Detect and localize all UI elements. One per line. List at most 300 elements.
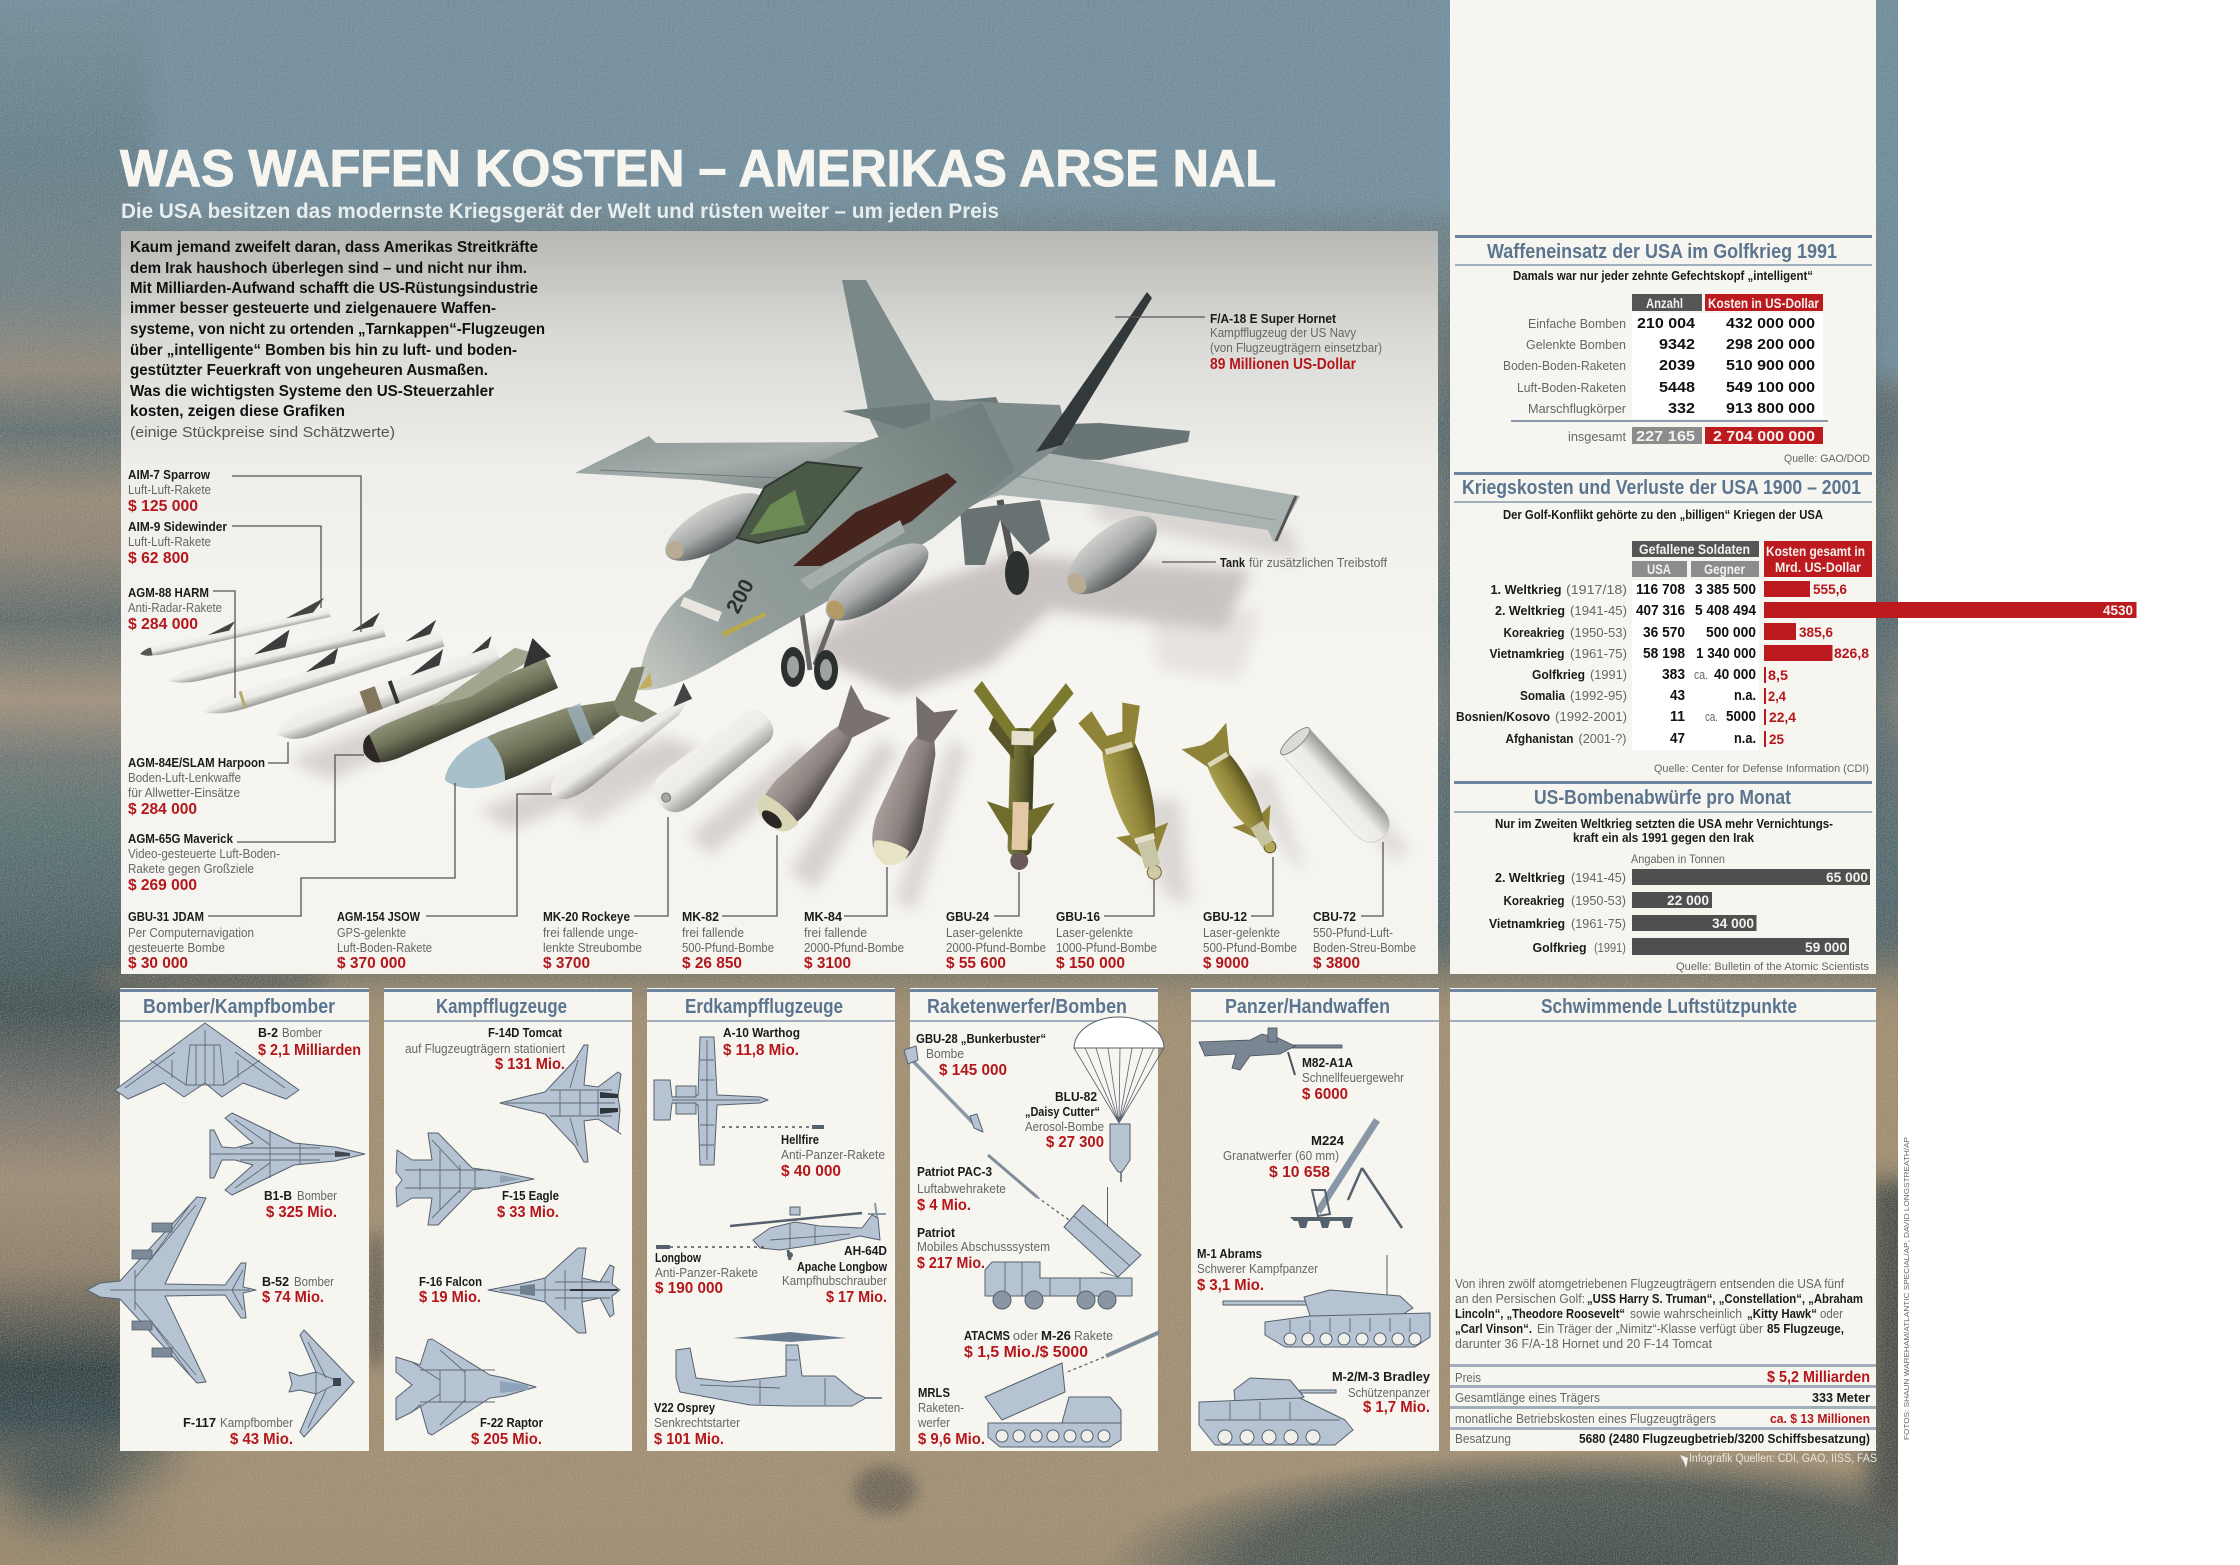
label: M224 xyxy=(1223,1134,1344,1181)
icon: ATACMS missile and MRLS launcher xyxy=(985,1332,1160,1447)
icon: B1-B xyxy=(210,1113,365,1195)
row: 1. Weltkrieg xyxy=(1490,581,1847,598)
label: F-22: $ 205 Mio. xyxy=(471,1431,542,1448)
label: F-15 xyxy=(497,1189,559,1221)
label: M-2/M-3 Bradley: $ 1,7 Mio. xyxy=(1363,1399,1430,1416)
label: A-10: A-10 Warthog xyxy=(723,1026,800,1040)
icon: Longbow missile path xyxy=(656,1245,765,1249)
row: Somalia: (1992-95) xyxy=(1570,689,1627,703)
row: Somalia: Somalia xyxy=(1520,689,1566,703)
icon: AGM-88 HARM missile xyxy=(197,618,445,721)
heading: US-Bombenabwürfe pro Monat xyxy=(1534,787,1791,809)
row: Golfkrieg: 383 xyxy=(1662,666,1685,683)
row: Vietnamkrieg: (1961-75) xyxy=(1570,647,1627,661)
icon: GBU-24 bomb xyxy=(969,681,1074,871)
row: Bosnien/Kosovo xyxy=(1456,708,1796,725)
callout: GBU-12: Laser-gelenkte xyxy=(1203,926,1280,940)
row: Vietnamkrieg xyxy=(1490,645,1869,662)
label: Longbow xyxy=(655,1251,758,1297)
unit note: Angaben in Tonnen xyxy=(1631,852,1725,866)
icon: right stabilizer xyxy=(1030,423,1190,460)
label: M82-A1A: $ 6000 xyxy=(1302,1086,1348,1103)
text block: carriers: „Carl Vinson“. xyxy=(1455,1322,1532,1336)
label: B1-B: B1-B xyxy=(264,1189,292,1203)
icon: GBU-28 bomb xyxy=(904,1046,983,1132)
label: BLU-82: $ 27 300 xyxy=(1046,1134,1104,1151)
label: Apache: $ 17 Mio. xyxy=(826,1289,887,1306)
text block: carriers: oder xyxy=(1820,1307,1843,1321)
callout: AIM-7 Sparrow xyxy=(128,468,361,632)
bar: Golfkrieg xyxy=(1532,938,1849,955)
bar: 2. Weltkrieg: (1941-45) xyxy=(1571,871,1626,885)
table rows xyxy=(1503,313,1823,419)
callout: F/A-18 xyxy=(1115,312,1382,373)
label: M-1 Abrams: M-1 Abrams xyxy=(1197,1247,1262,1261)
icon: F-22 xyxy=(396,1339,536,1435)
table rows: 298 200 000 xyxy=(1726,336,1815,353)
table: carrier facts: 5680 (2480 Flugzeugbetrieb/3200 Schiffsbesatzung) xyxy=(1579,1432,1870,1446)
totals row: 2 704 000 000 xyxy=(1713,428,1815,445)
icon: dark intake cavity xyxy=(793,473,957,566)
text block: carriers: „USS Harry S. Truman“, „Constellation“, „Abraham xyxy=(1587,1292,1863,1306)
icon: MK-82 bomb xyxy=(748,685,891,841)
label: F-15: F-15 Eagle xyxy=(502,1189,559,1203)
subheading: kraft ein als 1991 gegen den Irak xyxy=(1573,831,1754,845)
panel: Schwimmende Luftstützpunkte xyxy=(1450,988,1876,1451)
label: B-52: $ 74 Mio. xyxy=(262,1289,324,1306)
callout: GBU-24 xyxy=(946,872,1046,972)
row: Bosnien/Kosovo: ca. xyxy=(1705,710,1718,724)
bar: Vietnamkrieg xyxy=(1489,915,1756,931)
icon: V22 Osprey xyxy=(676,1332,882,1406)
bar: Vietnamkrieg: (1961-75) xyxy=(1571,917,1626,931)
bar chart: US-Bombenabwürfe pro Monat xyxy=(1454,781,1872,973)
label: GBU-28 xyxy=(916,1032,1046,1079)
icon: AGM-65G Maverick missile xyxy=(348,634,564,770)
callout: F/A-18: 89 Millionen US-Dollar xyxy=(1210,356,1356,373)
label: Hellfire xyxy=(781,1133,885,1180)
callout: AGM-84E/SLAM Harpoon: AGM-84E/SLAM Harpoon xyxy=(128,756,265,770)
row: 2. Weltkrieg: 407 316 xyxy=(1636,602,1685,619)
heading: Waffeneinsatz der USA im Golfkrieg 1991 xyxy=(1487,241,1837,263)
label: Apache: Kampfhubschrauber xyxy=(782,1274,887,1288)
table: carrier facts xyxy=(1450,1364,1876,1446)
label: V22 Osprey: V22 Osprey xyxy=(654,1401,715,1415)
column headers: Kosten in US-Dollar xyxy=(1708,296,1820,311)
bar: Golfkrieg: 59 000 xyxy=(1805,940,1847,955)
callout: MK-20 Rockeye: MK-20 Rockeye xyxy=(543,910,630,924)
bar: Golfkrieg: Golfkrieg xyxy=(1532,941,1586,955)
callout: MK-82: $ 26 850 xyxy=(682,955,742,972)
table rows: 5448 xyxy=(1659,379,1695,396)
row: Bosnien/Kosovo: 5000 xyxy=(1726,708,1756,725)
icon: M-2 Bradley vehicle xyxy=(1199,1378,1353,1445)
row: Koreakrieg: 500 000 xyxy=(1706,624,1756,641)
heading: Kampfflugzeuge xyxy=(436,996,567,1018)
callout: AIM-9 Sidewinder: AIM-9 Sidewinder xyxy=(128,520,227,534)
label: V22 Osprey xyxy=(654,1401,740,1448)
panel: Bomber/Kampfbomber xyxy=(87,988,369,1451)
callout: GBU-31 JDAM xyxy=(128,783,455,972)
row: Koreakrieg: Koreakrieg xyxy=(1504,626,1564,640)
icon: A-10 xyxy=(654,1037,768,1165)
row: Koreakrieg: (1950-53) xyxy=(1570,626,1627,640)
label: M-2/M-3 Bradley: Schützenpanzer xyxy=(1348,1386,1430,1400)
icon: fuel tank left xyxy=(656,480,774,574)
row: Somalia xyxy=(1520,687,1786,704)
callout: MK-84: MK-84 xyxy=(804,910,842,924)
table rows: 332 xyxy=(1668,400,1695,417)
label: Longbow: Longbow xyxy=(655,1251,701,1265)
illustration: F/A-18 E Super Hornet xyxy=(575,280,1300,690)
label: M82-A1A xyxy=(1302,1056,1404,1103)
subheading: Damals war nur jeder zehnte Gefechtskopf „intelligent“ xyxy=(1513,269,1813,283)
callout: MK-82 xyxy=(682,835,777,972)
row: 2. Weltkrieg: 4530 xyxy=(2103,603,2133,618)
label: Hellfire: $ 40 000 xyxy=(781,1163,841,1180)
row: Golfkrieg: 8,5 xyxy=(1768,667,1788,683)
label: Patriot PAC-3: Luftabwehrakete xyxy=(917,1182,1006,1196)
row: Koreakrieg: 385,6 xyxy=(1799,624,1833,640)
intro text: über „intelligente“ Bomben bis hin zu luft- und boden- xyxy=(130,342,517,359)
label: M224: Granatwerfer (60 mm) xyxy=(1223,1149,1339,1163)
callout: GBU-12 xyxy=(1203,857,1297,972)
row: Vietnamkrieg: 826,8 xyxy=(1834,645,1869,661)
icon: B-2 xyxy=(115,1023,299,1099)
row: Golfkrieg: Golfkrieg xyxy=(1532,668,1585,682)
callout: GBU-12: 500-Pfund-Bombe xyxy=(1203,941,1297,955)
callout: AGM-154 JSOW: $ 370 000 xyxy=(337,955,406,972)
icon: MK-20 Rockeye bomb xyxy=(646,701,782,820)
label: M-2/M-3 Bradley xyxy=(1332,1370,1430,1416)
row: Golfkrieg: 40 000 xyxy=(1714,666,1756,683)
bar: Koreakrieg: (1950-53) xyxy=(1571,894,1626,908)
table rows: Boden-Boden-Raketen xyxy=(1503,359,1626,373)
totals row: insgesamt xyxy=(1568,430,1627,444)
heading: Bomber/Kampfbomber xyxy=(143,996,335,1018)
callout: AGM-154 JSOW: Luft-Boden-Rakete xyxy=(337,941,432,955)
heading: Kriegskosten und Verluste der USA 1900 – 2001 xyxy=(1462,477,1861,499)
callout: AGM-154 JSOW: GPS-gelenkte xyxy=(337,926,406,940)
icon: Apache helicopter xyxy=(730,1203,886,1260)
row: Afghanistan: 47 xyxy=(1670,730,1685,747)
icon: B-52 xyxy=(87,1197,256,1383)
totals row xyxy=(1568,427,1823,445)
panel: main weapons overview xyxy=(121,231,1438,974)
label: Patriot: Patriot xyxy=(917,1226,956,1240)
callout: AGM-84E/SLAM Harpoon: $ 284 000 xyxy=(128,801,197,818)
label: Longbow: $ 190 000 xyxy=(655,1280,723,1297)
shadows under jet and weapons xyxy=(290,440,1410,910)
callout: GBU-16: GBU-16 xyxy=(1056,910,1100,924)
row: Vietnamkrieg: Vietnamkrieg xyxy=(1490,647,1564,661)
callout: CBU-72: Boden-Streu-Bombe xyxy=(1313,941,1416,955)
panel: Raketenwerfer/Bomben xyxy=(904,988,1164,1451)
callout: CBU-72: CBU-72 xyxy=(1313,910,1356,924)
row: Koreakrieg xyxy=(1504,623,1833,641)
row: Bosnien/Kosovo: (1992-2001) xyxy=(1555,710,1627,724)
label: ATACMS xyxy=(964,1329,1113,1361)
intro text: gestützter Feuerkraft von ungeheuren Ausmaßen. xyxy=(130,362,488,379)
label: M82-A1A: Schnellfeuergewehr xyxy=(1302,1071,1404,1085)
callout: AGM-154 JSOW xyxy=(337,794,552,972)
label: B-2: $ 2,1 Milliarden xyxy=(258,1042,361,1059)
callout: MK-82: 500-Pfund-Bombe xyxy=(682,941,774,955)
label: F-117: $ 43 Mio. xyxy=(230,1431,293,1448)
bar: 2. Weltkrieg xyxy=(1495,869,1870,885)
table: Waffeneinsatz Golfkrieg 1991 xyxy=(1455,235,1872,465)
heading: Raketenwerfer/Bomben xyxy=(927,996,1127,1018)
label: Patriot xyxy=(917,1226,1050,1272)
column headers: USA xyxy=(1647,562,1671,577)
callout: GBU-16: 1000-Pfund-Bombe xyxy=(1056,941,1157,955)
label: MRLS: werfer xyxy=(917,1416,950,1430)
row: Afghanistan: Afghanistan xyxy=(1506,732,1574,746)
label: Apache xyxy=(782,1244,887,1306)
icon: vertical tail left xyxy=(842,280,955,440)
source: Quelle: Center for Defense Information (CDI) xyxy=(1654,763,1869,775)
footer: infographic sources: Infografik Quellen: CDI, GAO, IISS, FAS xyxy=(1689,1453,1877,1465)
row: Golfkrieg: ca. xyxy=(1694,668,1708,682)
callout: F/A-18: Kampfflugzeug der US Navy xyxy=(1210,326,1357,340)
label: F-14D: F-14D Tomcat xyxy=(488,1026,563,1040)
callout: AIM-7 Sparrow: Luft-Luft-Rakete xyxy=(128,483,211,497)
callout: AGM-84E/SLAM Harpoon: für Allwetter-Einsätze xyxy=(128,786,240,800)
table: carrier facts: Preis xyxy=(1455,1371,1481,1385)
table: carrier facts: Gesamtlänge eines Trägers xyxy=(1455,1391,1600,1405)
label: B-2: B-2 xyxy=(258,1026,278,1040)
row: Vietnamkrieg: 58 198 xyxy=(1643,645,1685,662)
intro text: Kaum jemand zweifelt daran, dass Amerikas Streitkräfte xyxy=(130,239,538,256)
icon: left wing xyxy=(575,436,863,492)
callout: tank: Tank xyxy=(1220,556,1245,570)
callout: GBU-31 JDAM: GBU-31 JDAM xyxy=(128,910,204,924)
row: Golfkrieg: (1991) xyxy=(1590,668,1627,682)
totals row: 227 165 xyxy=(1636,428,1695,445)
row: 1. Weltkrieg: (1917/18) xyxy=(1566,583,1627,597)
callout: GBU-16 xyxy=(1056,880,1157,972)
column headers: Mrd. US-Dollar xyxy=(1775,560,1862,575)
callout: CBU-72 xyxy=(1313,842,1416,972)
label: Patriot PAC-3 xyxy=(917,1165,1006,1214)
subtitle: Die USA besitzen das modernste Kriegsgerät der Welt und rüsten weiter – um jeden Preis xyxy=(121,200,999,223)
label: F-16: F-16 Falcon xyxy=(419,1275,482,1289)
table: carrier facts: $ 5,2 Milliarden xyxy=(1767,1369,1870,1386)
label: Patriot PAC-3: Patriot PAC-3 xyxy=(917,1165,992,1179)
row: Somalia: n.a. xyxy=(1734,687,1756,704)
text block: carriers: „Kitty Hawk“ xyxy=(1747,1307,1817,1321)
label: F-117: Kampfbomber xyxy=(220,1416,293,1430)
callout: GBU-16: Laser-gelenkte xyxy=(1056,926,1133,940)
label: B-52: Bomber xyxy=(294,1275,334,1289)
callout: GBU-12: $ 9000 xyxy=(1203,955,1249,972)
label: Patriot: Mobiles Abschusssystem xyxy=(917,1240,1050,1254)
icon: AIM-7 Sparrow missile xyxy=(163,609,386,688)
row: Bosnien/Kosovo: 22,4 xyxy=(1769,709,1796,725)
text block: carriers: an den Persischen Golf: xyxy=(1455,1292,1585,1306)
row: Afghanistan xyxy=(1506,730,1784,747)
label: B-52: B-52 xyxy=(262,1275,289,1289)
row: 1. Weltkrieg: 3 385 500 xyxy=(1695,581,1756,598)
table rows: 2039 xyxy=(1659,357,1695,374)
table rows: Einfache Bomben xyxy=(1528,317,1626,331)
source: Quelle: GAO/DOD xyxy=(1784,453,1870,465)
callout: CBU-72: $ 3800 xyxy=(1313,955,1360,972)
heading: Schwimmende Luftstützpunkte xyxy=(1541,996,1797,1018)
callout: AIM-7 Sparrow: AIM-7 Sparrow xyxy=(128,468,210,482)
label: ATACMS: ATACMS xyxy=(964,1329,1010,1343)
label: B-2 xyxy=(258,1026,361,1059)
table rows: 9342 xyxy=(1659,336,1695,353)
bar: Vietnamkrieg: Vietnamkrieg xyxy=(1489,917,1565,931)
callout: MK-84: 2000-Pfund-Bombe xyxy=(804,941,904,955)
bar: Koreakrieg xyxy=(1504,892,1712,908)
row: Bosnien/Kosovo: Bosnien/Kosovo xyxy=(1456,710,1550,724)
callout: GBU-24: $ 55 600 xyxy=(946,955,1006,972)
label: F-14D: auf Flugzeugträgern stationiert xyxy=(405,1042,565,1056)
label: GBU-28: GBU-28 „Bunkerbuster“ xyxy=(916,1032,1046,1046)
icon: tail blade xyxy=(1036,292,1152,452)
row: Golfkrieg xyxy=(1532,666,1788,683)
label: MRLS: $ 9,6 Mio. xyxy=(918,1431,985,1448)
heading: Panzer/Handwaffen xyxy=(1225,996,1390,1018)
table rows: Luft-Boden-Raketen xyxy=(1517,381,1626,395)
callout: GBU-24: Laser-gelenkte xyxy=(946,926,1023,940)
text block: carriers: Von ihren zwölf atomgetriebenen Flugzeugträgern entsenden die USA fünf xyxy=(1455,1277,1844,1291)
label: B-52 xyxy=(262,1275,334,1306)
label: M-1 Abrams: Schwerer Kampfpanzer xyxy=(1197,1262,1318,1276)
label: M-2/M-3 Bradley: M-2/M-3 Bradley xyxy=(1332,1370,1430,1384)
row: 1. Weltkrieg: 1. Weltkrieg xyxy=(1490,583,1562,597)
callout: GBU-31 JDAM: Per Computernavigation xyxy=(128,926,254,940)
table rows: Gelenkte Bomben xyxy=(1526,338,1626,352)
label: ATACMS: oder xyxy=(1013,1329,1038,1343)
callout: GBU-16: $ 150 000 xyxy=(1056,955,1125,972)
table rows: 913 800 000 xyxy=(1726,400,1815,417)
callout: AIM-7 Sparrow: $ 125 000 xyxy=(128,498,198,515)
callout: AIM-9 Sidewinder xyxy=(128,520,321,608)
title: WAS WAFFEN KOSTEN – AMERIKAS ARSE NAL xyxy=(120,140,1276,198)
table rows: 549 100 000 xyxy=(1726,379,1815,396)
label: GBU-28: $ 145 000 xyxy=(939,1062,1007,1079)
row: 1. Weltkrieg: 555,6 xyxy=(1813,581,1847,597)
label: A-10: $ 11,8 Mio. xyxy=(723,1042,799,1059)
label: Patriot: $ 217 Mio. xyxy=(917,1255,985,1272)
text block: carriers: sowie wahrscheinlich xyxy=(1630,1307,1742,1321)
icon: cockpit canopy xyxy=(737,462,861,543)
bar: Golfkrieg: (1991) xyxy=(1594,941,1626,955)
label: B1-B xyxy=(264,1189,337,1221)
label: M224: M224 xyxy=(1311,1134,1344,1148)
icon: left stabilizer xyxy=(842,397,1003,431)
row: 2. Weltkrieg: 5 408 494 xyxy=(1695,602,1757,619)
label: ATACMS: $ 1,5 Mio./$ 5000 xyxy=(964,1344,1088,1361)
column headers: Gegner xyxy=(1704,562,1746,577)
row: Somalia: 43 xyxy=(1670,687,1685,704)
icon: MK-84 bomb xyxy=(863,696,960,872)
icon: right wing xyxy=(920,438,1300,543)
bar: Koreakrieg: 22 000 xyxy=(1667,893,1709,908)
icon: AGM-154 JSOW glide weapon xyxy=(542,683,702,807)
callout: GBU-31 JDAM: $ 30 000 xyxy=(128,955,188,972)
label: B1-B: Bomber xyxy=(297,1189,337,1203)
label: Hellfire: Anti-Panzer-Rakete xyxy=(781,1148,885,1162)
callout: AGM-84E/SLAM Harpoon xyxy=(128,742,288,818)
text block: carriers: Lincoln“, „Theodore Roosevelt“ xyxy=(1455,1307,1625,1321)
label: F-14D: $ 131 Mio. xyxy=(495,1056,565,1073)
label: Longbow: Anti-Panzer-Rakete xyxy=(655,1266,758,1280)
row: Somalia: 2,4 xyxy=(1768,688,1786,704)
icon: GBU-12 bomb xyxy=(1182,723,1295,865)
subheading: Nur im Zweiten Weltkrieg setzten die USA mehr Vernichtungs- xyxy=(1495,817,1833,831)
callout: AGM-65G Maverick: Video-gesteuerte Luft-Boden- xyxy=(128,847,280,861)
callout: CBU-72: 550-Pfund-Luft- xyxy=(1313,926,1393,940)
label: F-15: $ 33 Mio. xyxy=(497,1204,559,1221)
label: V22 Osprey: Senkrechtstarter xyxy=(654,1416,740,1430)
label: F-16: $ 19 Mio. xyxy=(419,1289,481,1306)
row: Koreakrieg: 36 570 xyxy=(1643,624,1685,641)
intro text: Mit Milliarden-Aufwand schafft die US-Rüstungsindustrie xyxy=(130,280,538,297)
callout: MK-20 Rockeye: frei fallende unge- xyxy=(543,926,638,940)
heading: Erdkampfflugzeuge xyxy=(685,996,843,1018)
icon: F-117 xyxy=(289,1330,354,1437)
panel: Erdkampfflugzeuge xyxy=(647,988,895,1451)
callout: MK-84: frei fallende xyxy=(804,926,867,940)
callout: GBU-24: 2000-Pfund-Bombe xyxy=(946,941,1046,955)
label: ATACMS: Rakete xyxy=(1074,1329,1113,1343)
callout: GBU-31 JDAM: gesteuerte Bombe xyxy=(128,941,225,955)
table rows: 510 900 000 xyxy=(1726,357,1815,374)
label: A-10 xyxy=(723,1026,800,1059)
label: MRLS: MRLS xyxy=(918,1386,950,1400)
bar: Vietnamkrieg: 34 000 xyxy=(1712,916,1754,931)
callout: tank: für zusätzlichen Treibstoff xyxy=(1249,556,1388,570)
callout: AGM-65G Maverick xyxy=(128,755,364,894)
icon: landing gear xyxy=(781,500,1050,690)
label: B-2: Bomber xyxy=(282,1026,322,1040)
icon: M-1 Abrams tank xyxy=(1223,1255,1430,1347)
column headers: Anzahl xyxy=(1646,296,1683,311)
icon: F-15 xyxy=(396,1133,534,1225)
label: F-14D xyxy=(405,1026,565,1073)
column headers xyxy=(1632,294,1823,311)
source: Quelle: Bulletin of the Atomic Scientists xyxy=(1676,961,1869,973)
column headers: Kosten gesamt in xyxy=(1766,544,1865,559)
callout: MK-20 Rockeye: $ 3700 xyxy=(543,955,590,972)
intro text xyxy=(130,239,545,441)
bar: 2. Weltkrieg: 2. Weltkrieg xyxy=(1495,871,1565,885)
intro text: kosten, zeigen diese Grafiken xyxy=(130,403,345,420)
label: F-22: F-22 Raptor xyxy=(480,1416,543,1430)
icon: fuselage xyxy=(638,403,1015,690)
callout: AGM-88 HARM: $ 284 000 xyxy=(128,616,198,633)
panel: Panzer/Handwaffen xyxy=(1191,988,1439,1451)
label: F-117: F-117 xyxy=(183,1416,216,1430)
photo credit: vertical text: FOTOS: SHAUN WAREHAM/ATLANTIC SPECIAL/AP; DAVID LONGSTREATH/AP xyxy=(1902,1137,1911,1440)
row: 1. Weltkrieg: 116 708 xyxy=(1636,581,1685,598)
callout: MK-84 xyxy=(804,867,904,972)
label: Hellfire: Hellfire xyxy=(781,1133,819,1147)
label: BLU-82 xyxy=(1025,1090,1104,1151)
callout: GBU-12: GBU-12 xyxy=(1203,910,1247,924)
row: 2. Weltkrieg: (1941-45) xyxy=(1570,604,1627,618)
callout: AIM-9 Sidewinder: Luft-Luft-Rakete xyxy=(128,535,211,549)
callout: MK-20 Rockeye xyxy=(543,817,668,972)
table and bar chart: Kriegskosten und Verluste xyxy=(1454,472,2136,775)
icon: M82 rifle xyxy=(1199,1028,1342,1075)
panel: Kampfflugzeuge xyxy=(384,988,632,1451)
label: M82-A1A: M82-A1A xyxy=(1302,1056,1353,1070)
